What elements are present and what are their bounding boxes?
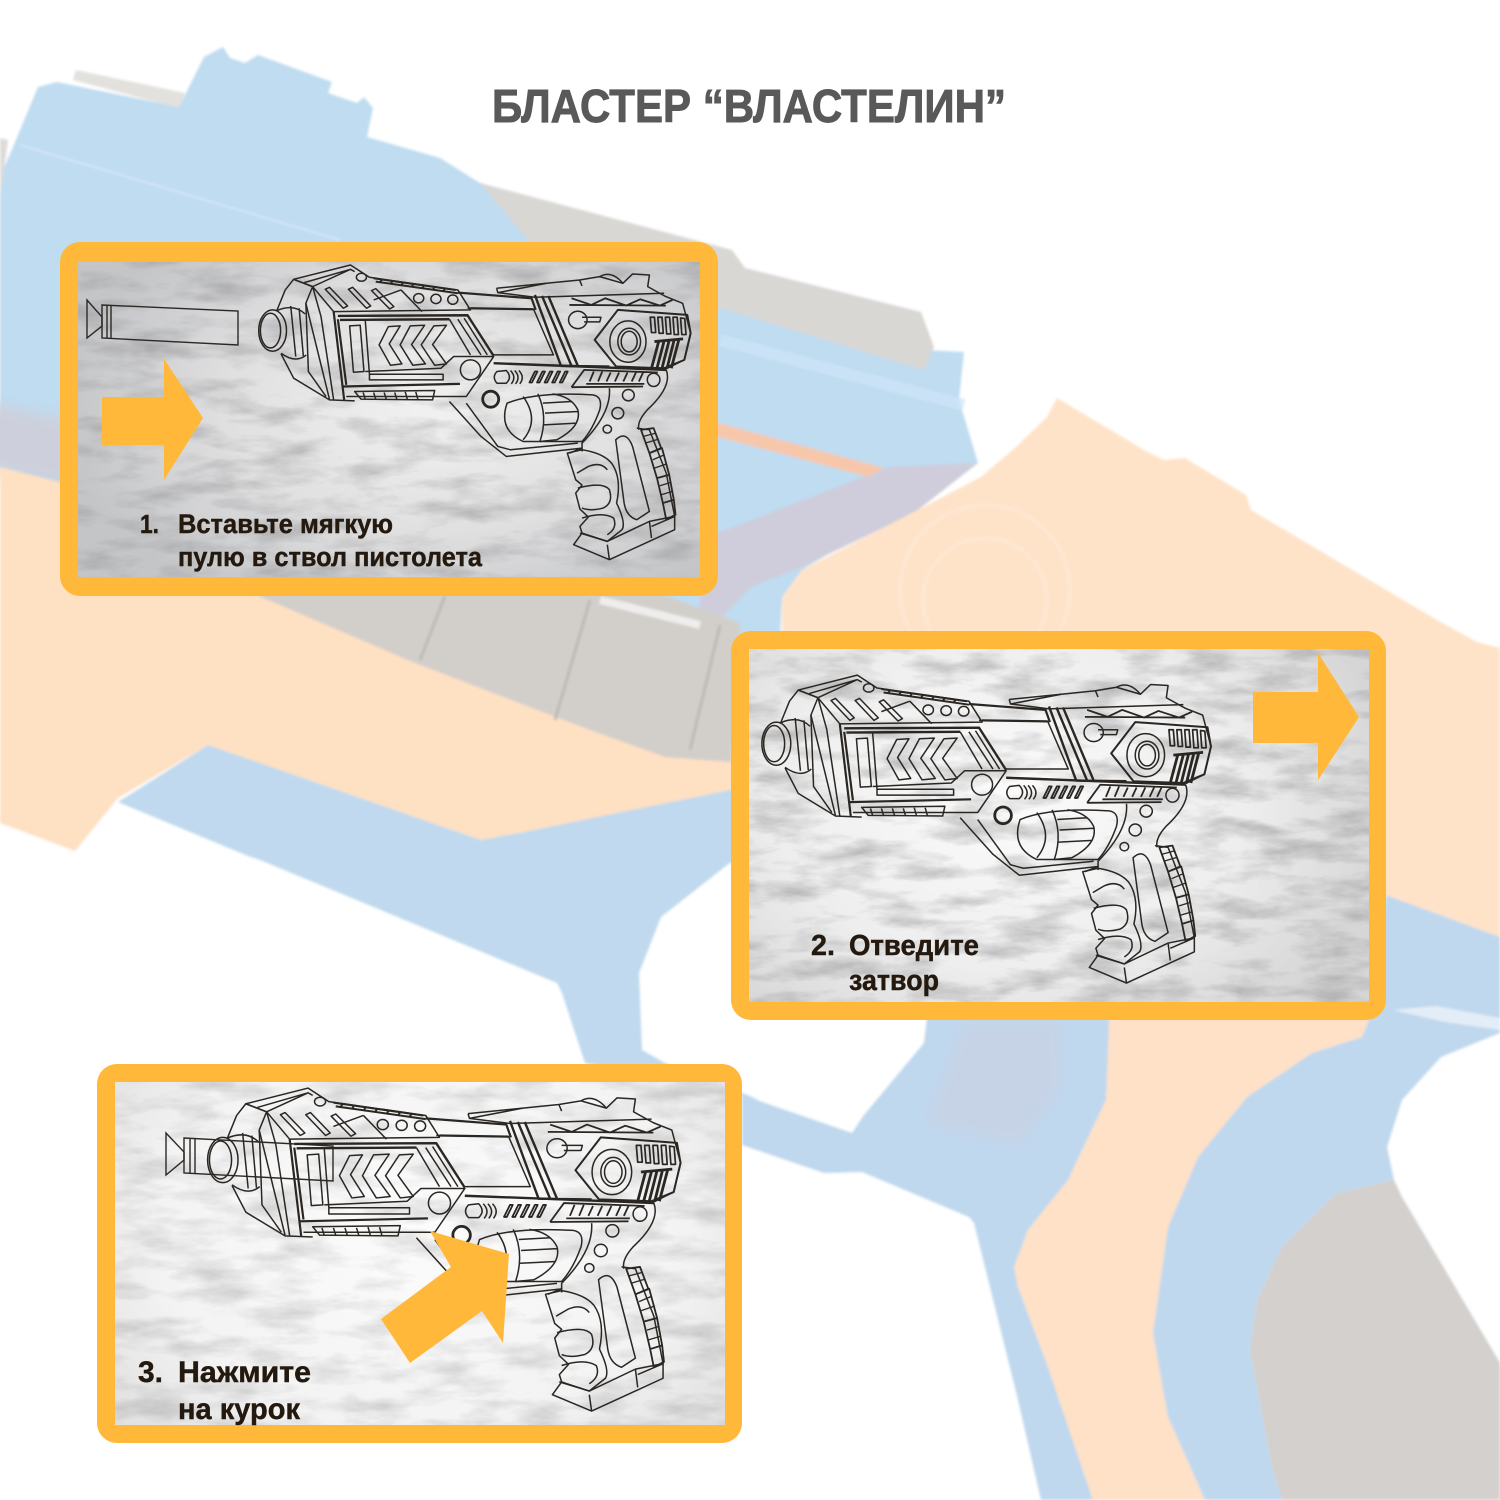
step 1 text: пулю в ствол пистолета	[178, 542, 483, 572]
panel picture background	[115, 1082, 725, 1425]
arrow: to trigger	[381, 1231, 509, 1363]
panel frame	[97, 1064, 742, 1443]
foam dart	[87, 300, 238, 345]
panel frame	[60, 242, 718, 596]
background: orange stripe	[700, 418, 884, 477]
blaster line drawing	[208, 1088, 681, 1411]
step 2 text: затвор	[849, 965, 939, 997]
background: grey rail	[480, 183, 934, 370]
step 3 text: 3.	[138, 1356, 163, 1389]
step 1 text	[140, 509, 483, 572]
arrow: right	[1253, 653, 1359, 780]
step 1 text: Вставьте мягкую	[178, 509, 393, 539]
foam dart loaded	[166, 1133, 333, 1181]
step 2 text: 2.	[811, 930, 835, 962]
step 3 text	[138, 1356, 311, 1426]
panel picture background	[78, 262, 700, 577]
step 1 text: 1.	[140, 509, 159, 539]
background: blue slide	[0, 47, 978, 660]
panel picture background	[749, 649, 1369, 1002]
blaster line drawing	[259, 265, 691, 560]
background: blue trigger assembly	[742, 1000, 1110, 1500]
step 3 text: на курок	[178, 1393, 301, 1426]
panel: step 1 insert dart	[60, 242, 718, 596]
step 2 text	[811, 930, 979, 997]
background: grey barrel	[245, 590, 740, 762]
background: trigger shade	[925, 1020, 1062, 1145]
background: slide highlight	[20, 145, 340, 240]
background: orange body	[782, 398, 1500, 937]
background: ring on orange	[900, 505, 1070, 675]
background: grey-violet band	[700, 463, 978, 640]
background: orange grip	[1014, 1000, 1380, 1500]
background: blue lower rail and guard	[118, 745, 760, 1100]
blaster line drawing	[762, 675, 1211, 983]
background: blue grip	[1153, 895, 1500, 1500]
title: БЛАСТЕР “ВЛАСТЕЛИН”	[492, 80, 1006, 132]
panel: step 3 pull trigger	[97, 1064, 742, 1443]
step 3 text: Нажмите	[178, 1356, 311, 1389]
background: grey grip panel	[1250, 1180, 1500, 1500]
arrow: right	[102, 359, 203, 480]
step 2 text: Отведите	[849, 930, 979, 962]
panel frame	[731, 631, 1386, 1020]
panel: step 2 pull slide	[731, 631, 1386, 1020]
